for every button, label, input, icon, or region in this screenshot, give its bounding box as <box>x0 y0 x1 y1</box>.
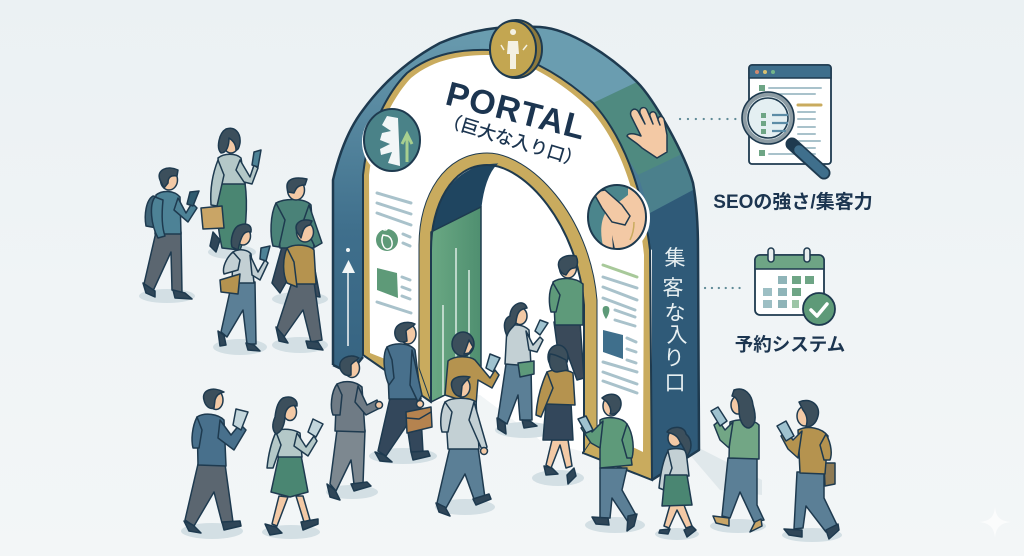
magnifier lens <box>744 94 792 142</box>
portal shadow on floor <box>690 448 762 495</box>
person: man with backpack <box>139 168 199 303</box>
spine circle icon <box>362 108 424 176</box>
top coin medallion <box>490 20 542 78</box>
person: woman in green skirt foreground <box>262 397 323 539</box>
calendar header <box>755 255 824 269</box>
calendar rings <box>768 248 810 262</box>
hand icon on arch <box>627 108 667 158</box>
person: woman in green with long hair <box>710 389 766 533</box>
portal arch <box>332 19 700 482</box>
check mark <box>811 304 827 316</box>
portal subtitle: （巨大な入り口） <box>441 110 585 171</box>
browser results list <box>769 88 821 154</box>
doorway green wall <box>431 207 481 402</box>
right panel content lines <box>603 265 637 393</box>
calendar grid <box>763 276 814 308</box>
magnifier rings <box>742 92 794 144</box>
PORTAL title: PORTAL <box>442 75 590 148</box>
person: man in brown sweater <box>272 220 328 353</box>
connector dots: SEO <box>680 118 736 120</box>
band green section <box>594 82 680 175</box>
icon: calendar with check <box>755 248 835 325</box>
left panel green circle icon <box>376 225 398 251</box>
massage circle icon <box>585 183 650 253</box>
person: man in green entering door <box>549 256 584 380</box>
person: woman with tote, top left <box>201 128 261 259</box>
left panel green image block <box>377 268 398 298</box>
door frame gold <box>419 153 597 453</box>
right panel blue image block <box>603 330 623 359</box>
person: man in green with phone near pillar <box>578 394 645 533</box>
vertical pillar text: 口 <box>664 372 686 395</box>
browser window <box>749 65 831 164</box>
person: girl with ponytail <box>655 427 699 540</box>
left pillar arrow <box>342 248 355 346</box>
doorway dark ceiling <box>431 164 497 250</box>
band light blue section <box>540 57 636 102</box>
title bar dots <box>755 70 775 74</box>
person: man in green sweater <box>271 178 328 306</box>
white panel <box>369 55 644 452</box>
browser title bar <box>749 65 831 78</box>
right panel location pin <box>603 306 609 319</box>
label: SEO: SEOの強さ/集客力 <box>713 191 873 213</box>
vertical pillar text: 入 <box>666 324 688 347</box>
doorway outline <box>431 165 584 452</box>
band navy section <box>649 190 697 390</box>
person: navy man with briefcase <box>369 322 437 464</box>
icon: browser with magnifier <box>742 65 831 173</box>
person: woman with shoulder bag <box>213 224 270 355</box>
infographic canvas <box>139 19 1009 542</box>
doorway wall light lines <box>443 248 469 395</box>
vertical pillar text: 集 <box>664 247 686 270</box>
person: woman in brown top and dark skirt <box>532 345 584 486</box>
arch outer band <box>334 28 698 478</box>
label: booking system: 予約システム <box>735 334 845 355</box>
vertical pillar text: 客 <box>662 277 684 300</box>
left panel content lines <box>377 193 411 313</box>
sparkle <box>979 507 1011 538</box>
person: man in brown with phone <box>777 400 842 542</box>
connector dots: booking <box>705 287 745 289</box>
magnifier handle fill <box>799 150 824 173</box>
vertical pillar text: り <box>664 347 684 370</box>
person: gray man <box>326 356 382 500</box>
person: navy man foreground left <box>181 389 248 539</box>
calendar body <box>755 255 824 315</box>
vertical pillar text: な <box>664 302 686 325</box>
arch outer outline <box>333 27 699 480</box>
result markers <box>759 85 765 156</box>
gold frame <box>363 50 652 480</box>
check badge <box>803 293 835 325</box>
door opening <box>431 165 584 452</box>
lens content <box>761 113 788 134</box>
band teal section <box>638 155 691 212</box>
person: light shirt man foreground <box>435 376 495 516</box>
person: woman in brown behind <box>445 332 500 405</box>
magnifier handle <box>792 144 824 173</box>
person: woman with ponytail and phone <box>495 303 555 438</box>
